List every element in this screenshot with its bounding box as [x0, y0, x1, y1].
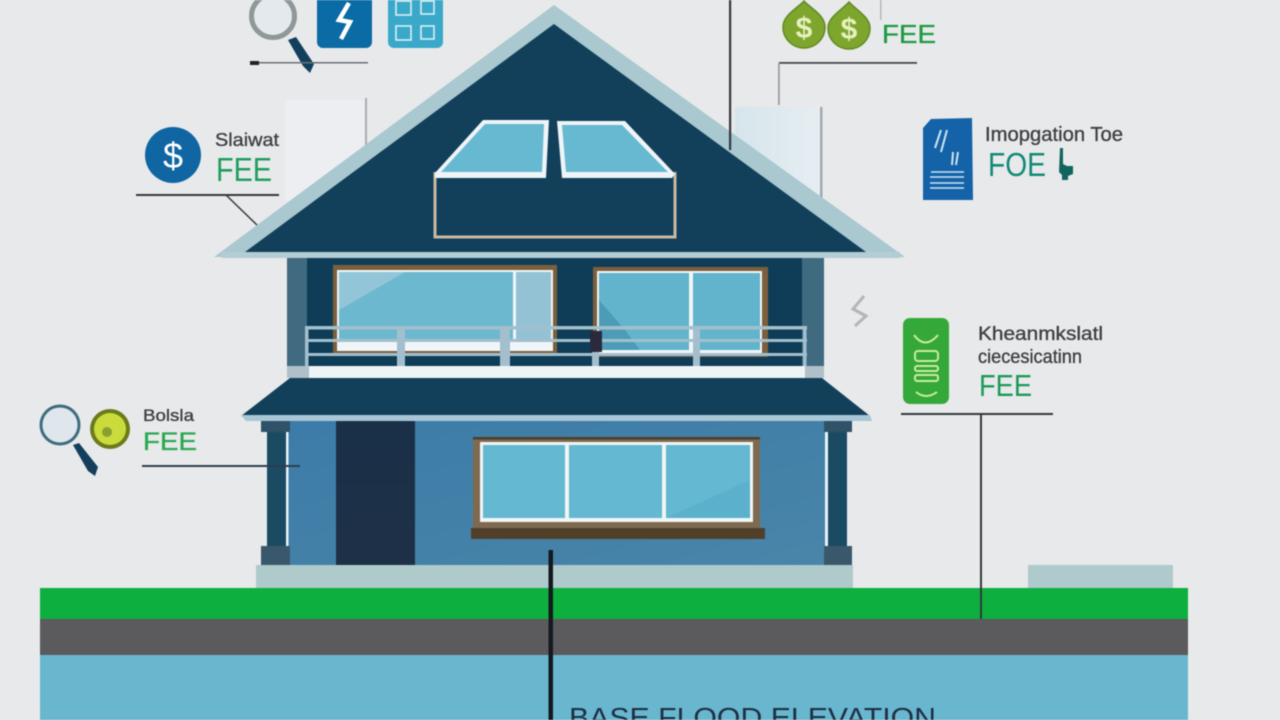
soil — [40, 619, 1188, 655]
house — [214, 5, 905, 588]
heading: Kheanmkslatl — [978, 324, 1103, 345]
leader line — [250, 61, 368, 65]
chimney panel: left — [285, 98, 367, 200]
chimney panel: right — [735, 107, 822, 217]
elevation marker line — [548, 550, 553, 720]
fee label: FEE — [216, 151, 272, 188]
right column — [824, 421, 852, 565]
upper right window — [593, 267, 768, 357]
callout: left fee — [136, 127, 279, 225]
callout: lower left fee — [41, 406, 300, 476]
heading: Imopgation Toe — [985, 124, 1123, 146]
icon: teal form card — [388, 0, 443, 48]
left column — [261, 421, 290, 565]
icon: magnifier — [41, 406, 98, 476]
upper left window — [333, 265, 557, 355]
fee label: FEE — [882, 19, 936, 49]
door — [336, 421, 415, 565]
fee label: FEE — [143, 428, 197, 456]
vertical leader — [729, 0, 731, 150]
flood water — [40, 655, 1188, 720]
leader line — [142, 465, 300, 467]
leader line — [778, 62, 917, 105]
porch roof — [241, 378, 872, 421]
icon: blue dollar coin — [145, 127, 201, 183]
callout: top left icons — [250, 0, 443, 73]
heading: Slaiwat — [215, 130, 279, 150]
roof — [214, 5, 905, 258]
icon: green dollar drops: $ — [841, 13, 858, 46]
fee label: FEE — [979, 368, 1032, 403]
icon: blue dollar card — [317, 0, 372, 48]
fee label: FOE — [988, 146, 1046, 183]
icon: olive coin — [90, 409, 130, 449]
icon: green dollar drops: $ — [796, 12, 813, 45]
balcony railing — [305, 326, 807, 367]
icon: small grey zigzag — [853, 296, 866, 326]
icon: small marker — [1059, 148, 1073, 180]
foundation — [256, 565, 853, 588]
dormer window — [435, 120, 675, 237]
leader line — [901, 413, 1053, 619]
side block — [1028, 565, 1173, 588]
upper storey — [287, 258, 824, 378]
icon: green card — [903, 318, 949, 404]
leader line — [136, 194, 279, 225]
ground layers — [40, 588, 1188, 720]
icon: magnifier — [252, 0, 314, 73]
callout: right fee — [853, 296, 1103, 619]
icon: green dollar drops — [783, 1, 870, 49]
ground window — [471, 437, 765, 539]
callout: top right fee — [729, 0, 936, 150]
balcony slab — [287, 366, 824, 378]
callout: inspection fee — [923, 118, 1123, 200]
grass — [40, 588, 1188, 619]
icon: blue dollar coin: $ — [163, 135, 183, 176]
heading: Bolsla — [143, 406, 195, 425]
icon: document — [923, 118, 973, 200]
ground floor — [261, 421, 852, 565]
subheading: ciecesicatinn — [978, 347, 1082, 368]
